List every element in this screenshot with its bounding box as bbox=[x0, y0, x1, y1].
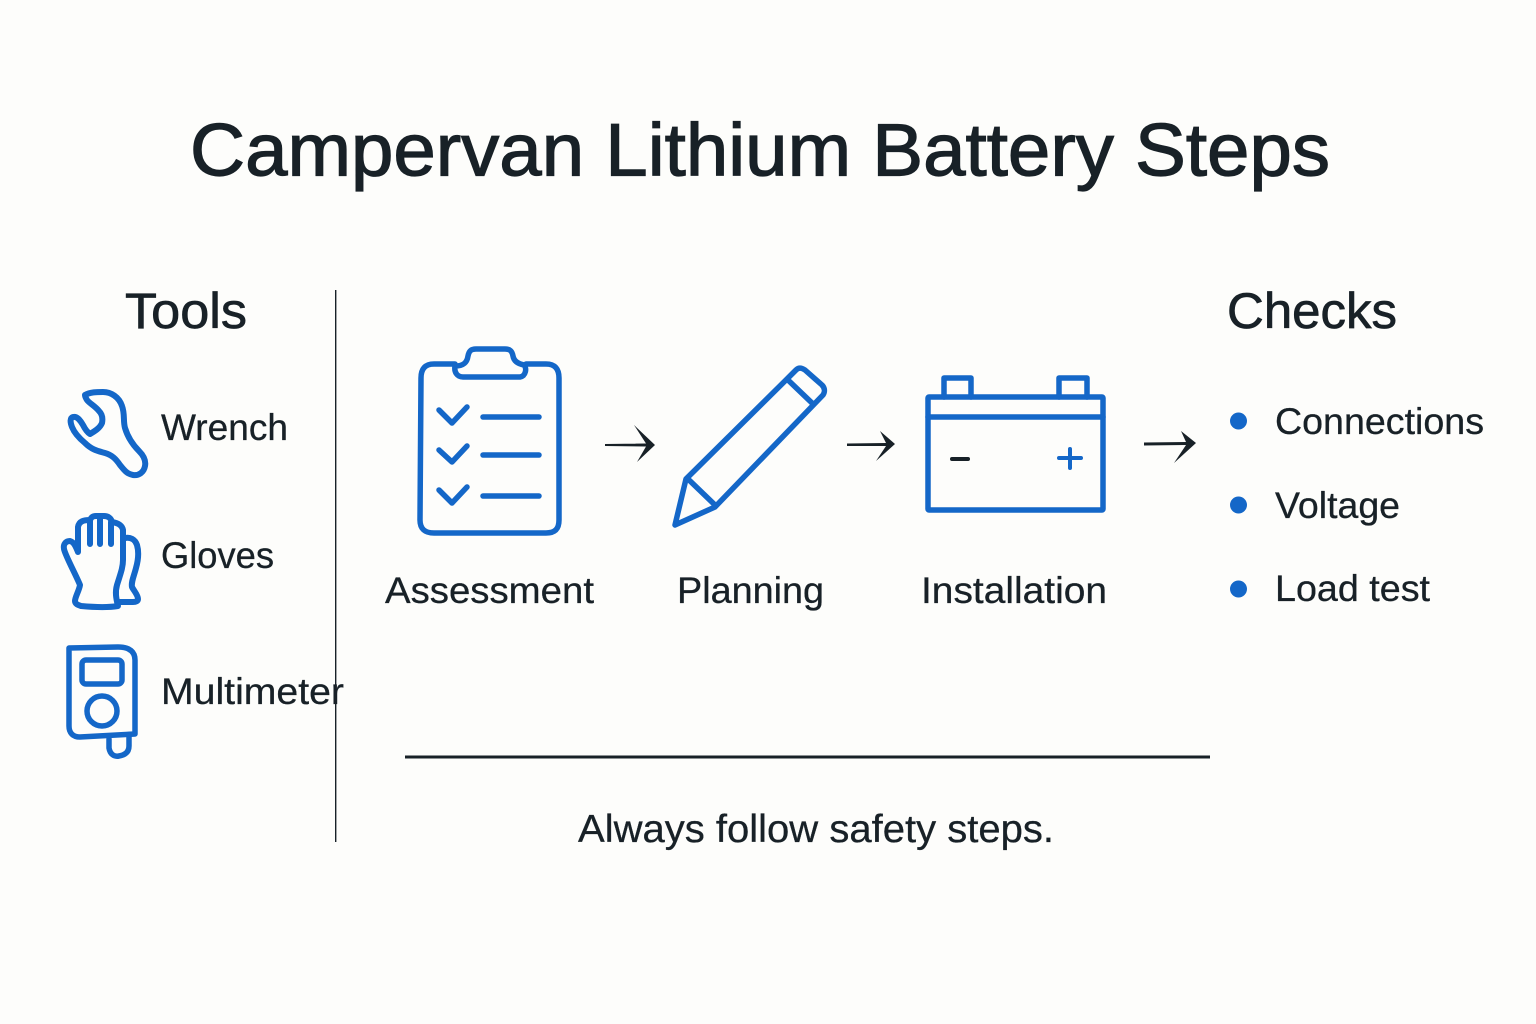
tools heading: Tools bbox=[125, 283, 247, 339]
arrow: installation to checks bbox=[1144, 431, 1196, 463]
label: voltage: Voltage bbox=[1275, 485, 1400, 526]
label: planning: Planning bbox=[677, 570, 824, 611]
arrow: assessment to planning bbox=[605, 425, 655, 462]
safety rule line bbox=[405, 756, 1210, 758]
icon: pencil bbox=[675, 368, 824, 525]
panel: tools bbox=[64, 283, 344, 756]
bullet: load test bbox=[1230, 580, 1247, 598]
label: connections: Connections bbox=[1275, 401, 1484, 442]
panel: checks bbox=[1227, 283, 1484, 609]
title: Campervan Lithium Battery Steps bbox=[190, 108, 1330, 192]
icon: multimeter bbox=[69, 647, 135, 756]
arrow: planning to installation bbox=[847, 431, 895, 461]
icon: gloves bbox=[64, 516, 138, 607]
panel: process steps bbox=[385, 349, 1196, 611]
icon: wrench bbox=[71, 392, 145, 475]
label: gloves: Gloves bbox=[161, 535, 274, 576]
divider bbox=[335, 290, 336, 842]
safety note: Always follow safety steps. bbox=[578, 808, 1054, 851]
checks heading: Checks bbox=[1227, 283, 1397, 339]
bullet: voltage bbox=[1230, 496, 1247, 514]
label: load test: Load test bbox=[1275, 568, 1431, 609]
label: wrench: Wrench bbox=[161, 407, 288, 448]
label: installation: Installation bbox=[921, 570, 1107, 611]
icon: battery bbox=[928, 378, 1103, 510]
bullet: connections bbox=[1230, 412, 1247, 430]
label: assessment: Assessment bbox=[385, 570, 595, 611]
label: multimeter: Multimeter bbox=[161, 671, 344, 712]
icon: clipboard bbox=[420, 349, 559, 533]
